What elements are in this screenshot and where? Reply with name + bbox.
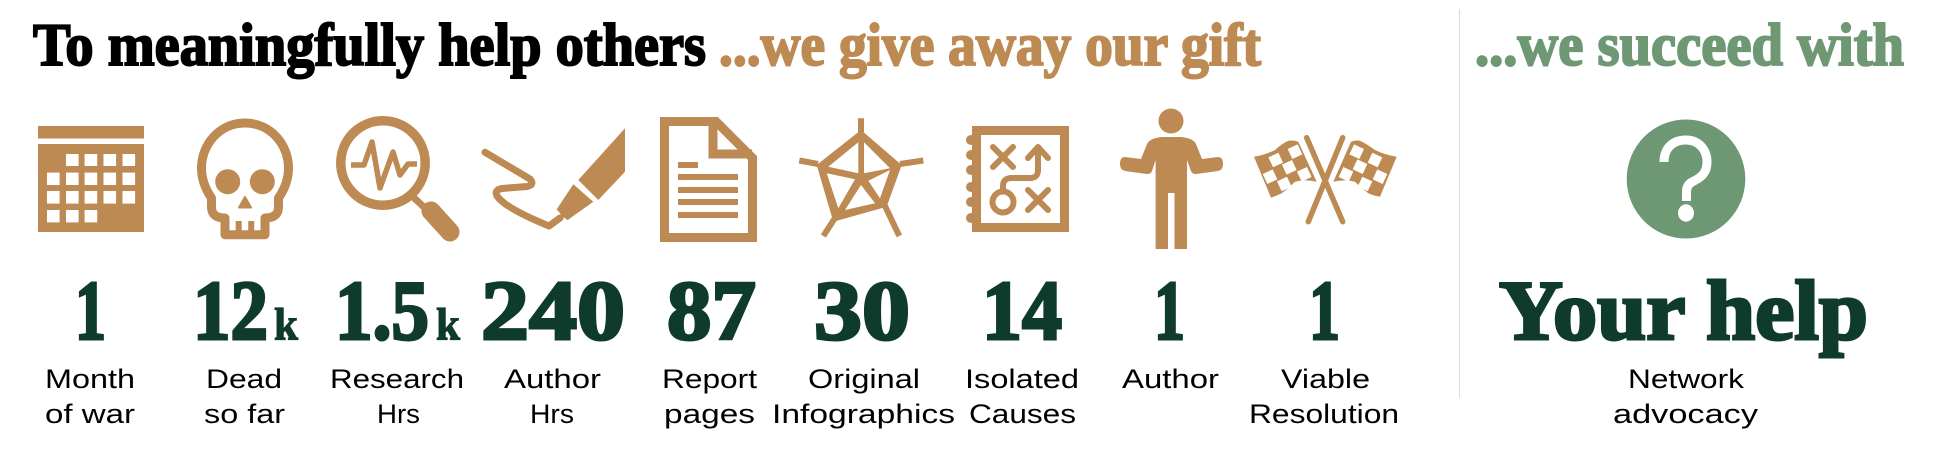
stat: 1 month of war: Month [45, 364, 135, 394]
stat: 87 report pages: pages [664, 399, 755, 429]
stat: 30 original infographics: Infographics [772, 399, 955, 429]
icon: crossed checkered flags [1254, 138, 1397, 222]
icon: magnifier with pulse [341, 121, 450, 232]
heading: we succeed with: ...we succeed with [1475, 12, 1904, 78]
stat: 1.5k research hours: k [436, 298, 460, 350]
icon: question mark circle [1627, 120, 1745, 238]
stat: 12k dead so far: 12 [193, 264, 268, 358]
stat: 12k dead so far: k [274, 298, 298, 350]
stat: 87 report pages: 87 [667, 264, 756, 358]
icon: skull [202, 123, 288, 235]
stat: 240 author hours: Hrs [530, 399, 574, 429]
stat: 87 report pages [662, 264, 758, 429]
icon: strategy notebook [966, 130, 1064, 228]
stat: 1 author: 1 [1154, 264, 1185, 358]
stat: 1.5k research hours: 1.5 [335, 264, 429, 358]
stat: 1 month of war: 1 [75, 264, 106, 358]
stat: 1 month of war: of war [45, 399, 135, 429]
icon: person shrugging [1120, 108, 1223, 249]
heading: we give away our gift: ...we give away our gift [719, 12, 1261, 78]
stat: 1 viable resolution: Viable [1281, 364, 1370, 394]
stat: 1 author: Author [1122, 364, 1219, 394]
icon: calendar [38, 126, 144, 232]
stat: 240 author hours: 240 [481, 264, 625, 358]
stat: 87 report pages: Report [662, 364, 758, 394]
title: To meaningfully help others: To meaningfully help others [33, 12, 706, 78]
stat: 1.5k research hours: Hrs [377, 399, 420, 429]
stat: 1.5k research hours: Research [330, 364, 464, 394]
stat: 1 viable resolution [1249, 264, 1399, 429]
call to action: your help, network advocacy [1499, 264, 1868, 429]
stat: 30 original infographics: Original [808, 364, 920, 394]
stat: 14 isolated causes [965, 264, 1079, 429]
stat: 240 author hours: Author [504, 364, 601, 394]
stat: 12k dead so far: Dead [206, 364, 282, 394]
icon: pen with scribble [485, 128, 625, 226]
stat: 12k dead so far [193, 264, 298, 429]
stat: 14 isolated causes: 14 [982, 264, 1062, 358]
stat: 1 viable resolution: 1 [1309, 264, 1340, 358]
icon: radar chart [799, 118, 923, 236]
stat: 30 original infographics: 30 [814, 264, 910, 358]
stat: 1 author [1122, 264, 1219, 394]
stat: 14 isolated causes: Causes [969, 399, 1076, 429]
call to action: your help, network advocacy: Your help [1499, 264, 1868, 358]
stat: 12k dead so far: so far [204, 399, 285, 429]
stat: 1 month of war [45, 264, 135, 429]
icon: report document [664, 121, 752, 238]
stat: 30 original infographics [772, 264, 955, 429]
stat: 1.5k research hours [330, 264, 464, 429]
stat: 14 isolated causes: Isolated [965, 364, 1079, 394]
stat: 240 author hours [481, 264, 625, 429]
call to action: your help, network advocacy: advocacy [1613, 399, 1759, 429]
call to action: your help, network advocacy: Network [1628, 364, 1745, 394]
stat: 1 viable resolution: Resolution [1249, 399, 1399, 429]
